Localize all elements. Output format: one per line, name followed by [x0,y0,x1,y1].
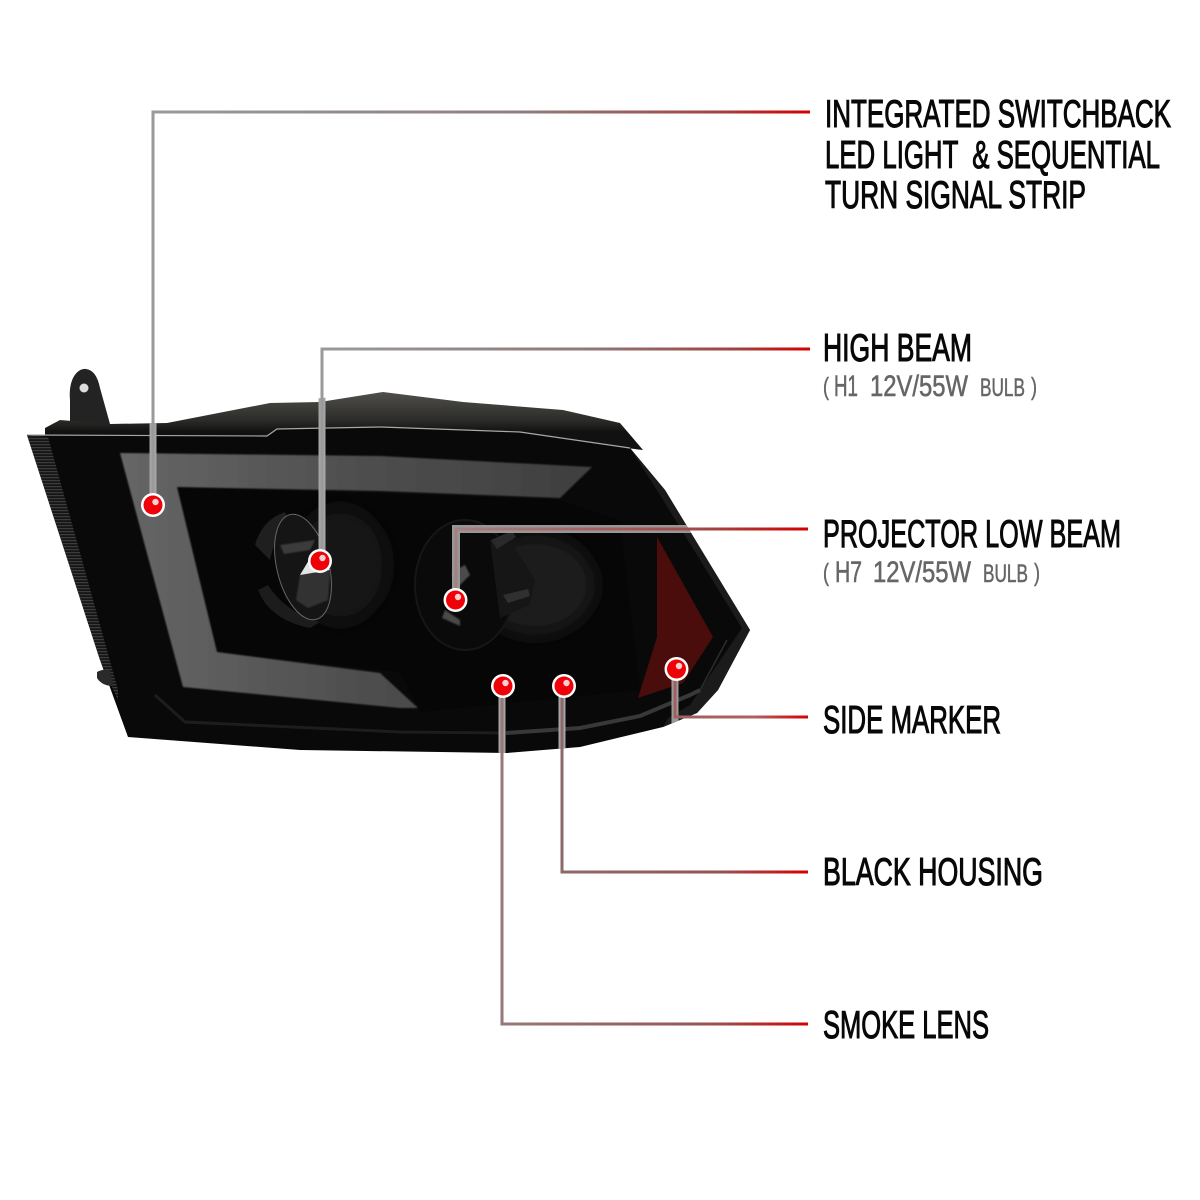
bulb highlight [300,555,330,575]
line halo over lamp [452,525,691,589]
callout line: projector low beam [456,529,808,600]
bracket hole [80,384,88,392]
bezel inner highlight [700,640,727,690]
headlight assembly [27,369,750,753]
sublabel: h7 bulb: ) [1034,559,1040,587]
sublabel: h7 bulb [823,556,1040,589]
top chrome edge [27,427,630,448]
callout line: side marker [672,680,808,724]
label: high beam: HIGH BEAM [823,327,972,370]
line halo over lamp [318,398,326,550]
low beam lens [415,520,515,650]
line halo over lamp [558,696,566,749]
marker: side marker [664,657,688,681]
line halo over lamp [498,697,506,753]
sublabel: h7 bulb: 12V/55W [873,556,972,589]
right bezel edge [630,448,750,727]
inner projector bay [177,487,640,712]
label: integrated switchback: TURN SIGNAL STRIP [825,174,1086,217]
marker: high beam [308,549,332,573]
callout line: black housing [562,690,808,872]
sublabel: h7 bulb: ( [823,559,829,587]
marker: low beam [444,588,468,612]
rear housing [45,392,643,450]
line halo over lamp [672,680,678,726]
bottom clip [97,670,113,686]
marker: switchback strip [141,493,165,517]
low beam lens glint [452,565,470,590]
label: side marker: SIDE MARKER [823,699,1001,742]
high beam shroud [255,512,290,560]
line halo over lamp [150,423,156,494]
callout line: high beam [322,349,810,560]
high beam reflector [265,508,341,626]
marker: black housing [552,674,576,698]
amber side marker [638,537,713,698]
label: integrated switchback [825,93,1171,217]
sublabel: h1 bulb: 12V/55W [870,370,969,403]
LED switchback strip [120,453,592,708]
sublabel: h1 bulb: H1 [834,370,858,403]
callout line: smoke lens [502,690,808,1024]
high beam barrel glow [292,507,388,623]
lower trim [506,690,700,733]
mounting bracket [70,369,110,426]
callout line: integrated switchback [153,112,810,505]
side hatch bezel [27,435,118,700]
sublabel: h1 bulb: BULB [980,374,1025,402]
marker: smoke lens [491,674,515,698]
low beam barrel glow [475,535,595,635]
label: black housing: BLACK HOUSING [823,851,1043,894]
low beam collar [490,540,535,618]
sublabel: h7 bulb: H7 [835,556,862,589]
sublabel: h1 bulb: ( [823,373,829,401]
sublabel: h1 bulb [823,370,1037,403]
sublabel: h1 bulb: ) [1031,373,1037,401]
lamp body [27,427,750,753]
sublabel: h7 bulb: BULB [983,560,1028,588]
label: smoke lens: SMOKE LENS [823,1004,989,1047]
